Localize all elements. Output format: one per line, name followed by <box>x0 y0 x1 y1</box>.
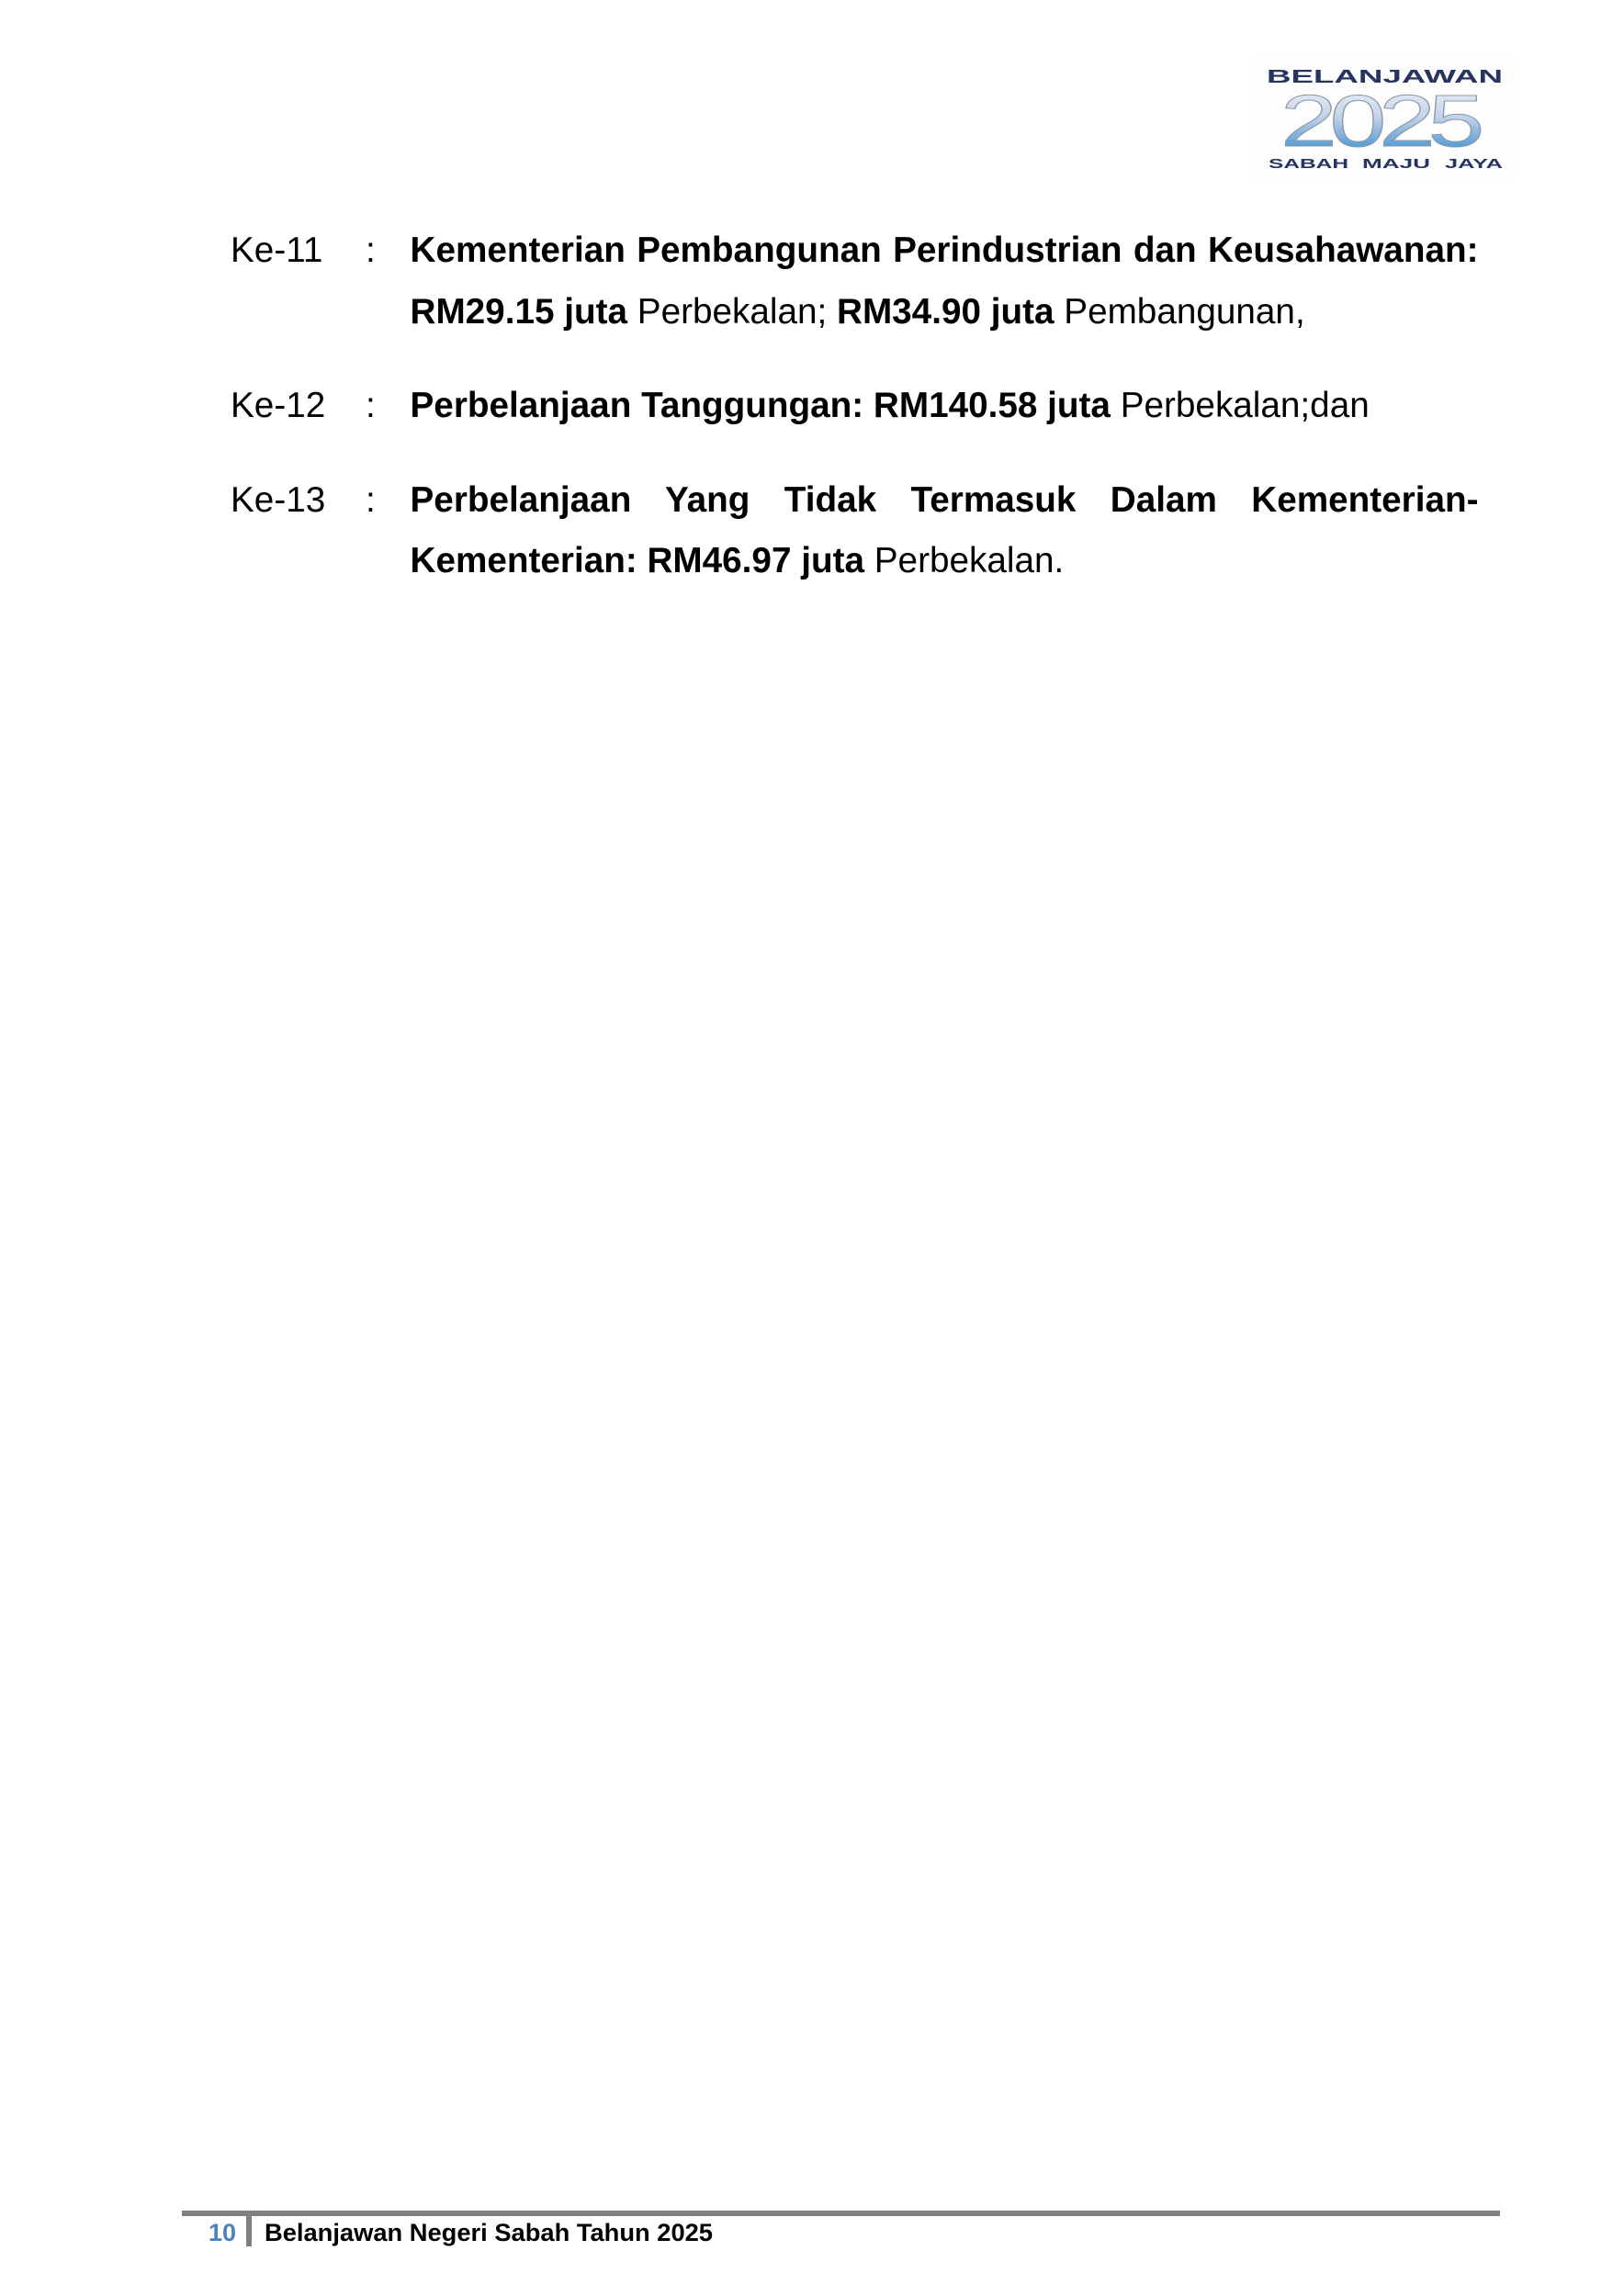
entry: Ke-12: Perbelanjaan Tanggungan: RM140.58 juta Perbekalan;dan <box>410 386 1370 425</box>
logo: Belanjawan 2025 Sabah Maju Jaya <box>1267 67 1503 172</box>
entry: Ke-13: Kementerian: RM46.97 juta Perbekalan. <box>410 541 1064 580</box>
entry: Ke-11: RM29.15 juta Perbekalan; RM34.90 juta Pembangunan, <box>410 292 1305 332</box>
entry: Ke-13 <box>231 480 1479 580</box>
entry: Ke-11 <box>231 231 1479 332</box>
document title: Belanjawan Negeri Sabah Tahun 2025 <box>265 2219 713 2246</box>
entry: Ke-13: Ke-13 <box>231 480 325 520</box>
entry: Ke-13: : <box>366 480 376 520</box>
logo: Belanjawan 2025 Sabah Maju Jaya: SABAH <box>1269 156 1348 172</box>
entry: Ke-12: Ke-12 <box>231 386 325 425</box>
logo: Belanjawan 2025 Sabah Maju Jaya: 2025 <box>1280 79 1481 162</box>
entry: Ke-11: : <box>366 231 376 270</box>
page number: 10 <box>209 2219 236 2246</box>
logo: Belanjawan 2025 Sabah Maju Jaya: JAYA <box>1445 156 1503 172</box>
entry: Ke-13: Perbelanjaan Yang Tidak Termasuk Dalam Kementerian- <box>410 480 1479 520</box>
entry: Ke-11: Ke-11 <box>231 231 322 270</box>
footer: page number and document title <box>182 2211 1500 2246</box>
entry: Ke-12: : <box>366 386 376 425</box>
logo: Belanjawan 2025 Sabah Maju Jaya: BELANJAWAN <box>1267 67 1503 87</box>
logo: Belanjawan 2025 Sabah Maju Jaya: MAJU <box>1362 156 1430 172</box>
entry: Ke-11: Kementerian Pembangunan Perindustrian dan Keusahawanan: <box>410 231 1479 270</box>
